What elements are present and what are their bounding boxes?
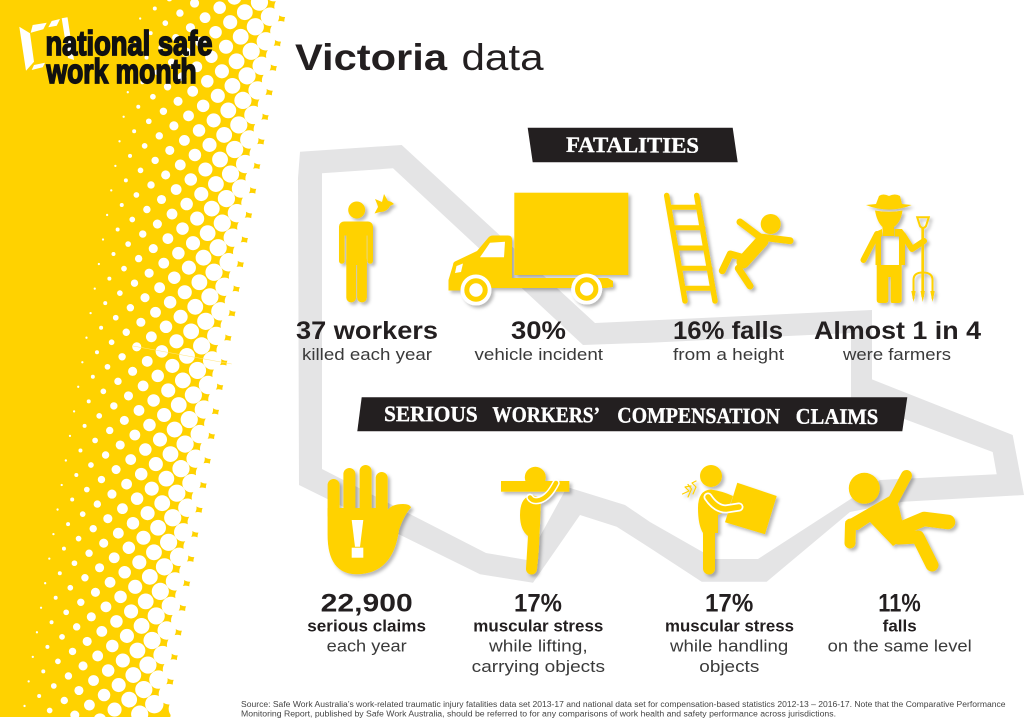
stat: 17% handling objects: 17% [705, 590, 753, 618]
stat: 30%: 30% [511, 317, 566, 345]
stat: 11% falls on the same level [828, 590, 972, 656]
stat: 22,900 serious claims: serious claims [307, 618, 426, 636]
icon: worker carrying plank [501, 467, 569, 575]
icon: worker handling box with back pain [682, 465, 777, 568]
stat: 30% [474, 317, 603, 364]
stat: 16% falls [673, 317, 784, 364]
stat: 37 workers: 37 workers [296, 317, 438, 345]
stat: 16% falls: from a height [673, 345, 784, 364]
source note: Source: Safe Work Australia’s work-related traumatic injury fatalities data set 2013-17 and national data set for compensation-based statistics 2012-13 – 2016-17. Note that the Comparative Performance [241, 700, 1006, 709]
icon: delivery truck [448, 193, 628, 306]
stat: 30%: vehicle incident [474, 345, 603, 364]
stat: 11% falls on the same level: on the same level [828, 637, 972, 656]
stat: 17% lifting, carrying objects: while lifting, [488, 637, 588, 656]
title: Victoria [295, 37, 447, 78]
stat: 17% handling objects: objects [699, 657, 759, 676]
title [295, 37, 544, 78]
panel: yellow halftone side band [0, 0, 303, 720]
stat: 17% lifting, carrying objects [472, 590, 605, 676]
heading: serious workers' compensation claims banner: CLAIMS [796, 404, 878, 429]
icon: person slipping over [845, 473, 948, 565]
icon: farmer with pitchfork [864, 194, 935, 303]
stat: 11% falls on the same level: 11% [878, 590, 921, 618]
icon: worker with dove [339, 194, 394, 298]
stat: 22,900 serious claims: 22,900 [321, 590, 413, 618]
source note: Monitoring Report, published by Safe Work Australia, should be referred to for any comparisons of work health and safety performance across jurisdictions. [241, 709, 836, 718]
stat: 22,900 serious claims [307, 590, 426, 656]
stat: 17% lifting, carrying objects: 17% [514, 590, 562, 618]
logo: national safe work month: work month [46, 53, 197, 91]
map outline of Victoria [298, 145, 1024, 583]
heading: fatalities banner: FATALITIES [566, 132, 699, 158]
stat: almost 1 in 4 [814, 317, 981, 364]
icon: raised hand with exclamation mark [328, 471, 411, 574]
logo: national safe work month: national safe [46, 25, 212, 63]
stat: 17% lifting, carrying objects: muscular stress [473, 618, 603, 636]
stat: 11% falls on the same level: falls [883, 618, 917, 636]
stat: 17% handling objects: while handling [669, 637, 788, 656]
stat: 16% falls: 16% falls [673, 317, 783, 345]
stat: 22,900 serious claims: each year [327, 637, 407, 656]
heading: fatalities banner [528, 128, 738, 162]
stat: 17% lifting, carrying objects: carrying objects [472, 657, 605, 676]
logo: national safe work month [19, 17, 212, 91]
heading: serious workers' compensation claims banner: SERIOUS [384, 401, 478, 427]
icon: ladder and falling person [667, 196, 790, 301]
title: data [462, 37, 544, 78]
source note [241, 700, 1006, 718]
stat: 17% handling objects: muscular stress [665, 618, 794, 636]
stat: 37 workers [296, 317, 438, 364]
heading: serious workers' compensation claims banner: COMPENSATION [617, 402, 780, 428]
heading: serious workers' compensation claims banner [357, 397, 907, 431]
stat: almost 1 in 4: Almost 1 in 4 [814, 317, 981, 345]
stat: almost 1 in 4: were farmers [842, 345, 951, 364]
heading: serious workers' compensation claims banner: WORKERS’ [492, 402, 600, 427]
stat: 37 workers: killed each year [302, 345, 432, 364]
stat: 17% handling objects [665, 590, 794, 676]
